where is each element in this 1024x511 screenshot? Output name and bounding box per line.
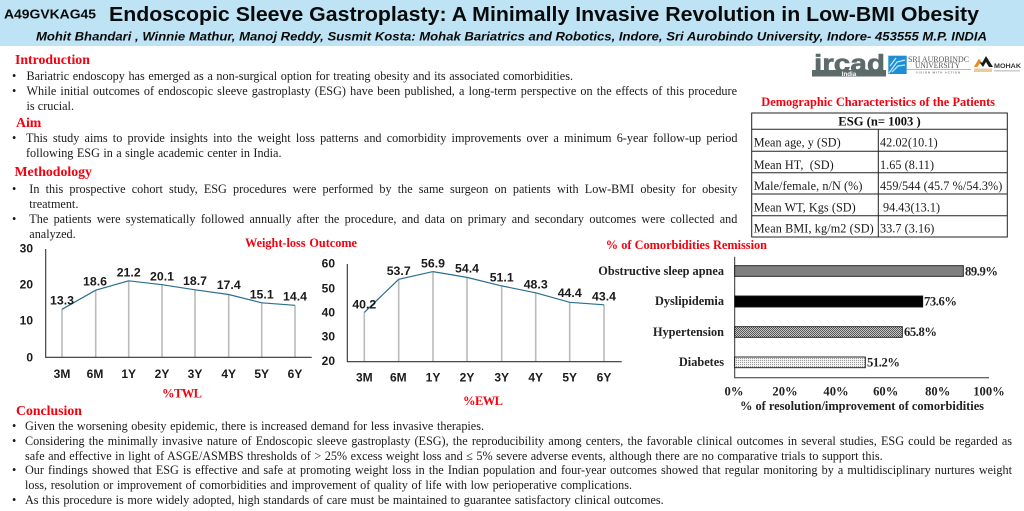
line chart: %TWL: 30: [20, 242, 33, 256]
bullet list: conclusion: safe and effective in light of ASGE/ASMBS thresholds of > 25% excess weight loss and ≤ 5% severe adverse events, although there are no comparative trials to support this.: [25, 449, 883, 463]
bar chart: comorbidity remission: Dyslipidemia: [655, 294, 724, 308]
line chart: %EWL: 6Y: [597, 371, 611, 385]
bullet list: conclusion: As this procedure is more widely adopted, high standards of care must be maintained to guarantee satisfactory clinical outcomes.: [25, 493, 664, 507]
table heading: demographic characteristics: Demographic Characteristics of the Patients: [761, 95, 995, 109]
line chart: %TWL: 5Y: [254, 367, 269, 381]
bullet list: methodology: treatment.: [29, 197, 78, 211]
table: demographic characteristics: Mean HT, (SD): [754, 158, 834, 172]
line chart: %EWL: 1Y: [426, 371, 440, 385]
line chart: %TWL: 10: [20, 314, 33, 328]
bullet list: introduction: is crucial.: [26, 99, 74, 113]
line chart: %EWL: 4Y: [528, 371, 543, 385]
logo: ircad india: ircad: [814, 50, 885, 78]
bullet list: methodology: In this prospective cohort study, ESG procedures were performed by the same surgeon on patients with Low-BMI obesity for obesity: [29, 182, 737, 196]
line chart: %TWL: 18.6: [83, 274, 107, 288]
line chart: %EWL: 3Y: [494, 371, 509, 385]
bullet list: methodology: •: [12, 182, 16, 196]
line chart: %EWL: 60: [322, 257, 335, 271]
line chart: %TWL: 20: [20, 278, 33, 292]
bullet list: introduction: [12, 69, 737, 113]
abstract id: A49GVKAG45: [4, 7, 96, 22]
line chart: %TWL: 21.2: [117, 265, 141, 279]
table: demographic characteristics: [751, 112, 1008, 238]
table: demographic characteristics: 459/544 (45.7 %/54.3%): [880, 179, 1002, 193]
line chart: %EWL: 43.4: [592, 289, 616, 303]
bullet list: conclusion: •: [12, 493, 16, 507]
line chart: %EWL: 56.9: [421, 257, 445, 271]
bar chart: comorbidity remission: 65.8%: [904, 325, 937, 339]
line chart: %TWL: %TWL: [162, 386, 202, 400]
bullet list: conclusion: •: [12, 434, 16, 448]
bullet list: introduction: While initial outcomes of endoscopic sleeve gastroplasty (ESG) have been published, a long-term perspective on the effects of this procedure: [26, 84, 737, 98]
table: demographic characteristics: Mean WT, Kgs (SD): [754, 201, 856, 215]
line chart: %EWL: 40: [322, 306, 335, 320]
line chart: %TWL: 17.4: [217, 278, 241, 292]
line chart: %TWL: 2Y: [155, 367, 169, 381]
heading: aim: Aim: [16, 114, 41, 130]
heading: methodology: Methodology: [14, 164, 92, 178]
heading: conclusion: Conclusion: [16, 402, 82, 418]
title: Endoscopic Sleeve Gastroplasty: A Minimally Invasive Revolution in Low-BMI Obesity: [109, 3, 980, 26]
bullet list: introduction: •: [12, 84, 16, 98]
line chart: %EWL: 20: [322, 354, 335, 368]
bullet list: conclusion: Our findings showed that ESG is effective and safe at promoting weight loss in the Indian population and four-year outcomes showed that regular monitoring by a multidisciplinary nurtures weight: [25, 463, 1012, 477]
line chart: %EWL: 51.1: [490, 271, 514, 285]
logo: sri aurobindo university: [888, 55, 971, 74]
section: aim: [12, 114, 738, 160]
heading: introduction: Introduction: [15, 52, 90, 67]
bullet list: conclusion: [12, 419, 1012, 507]
bullet list: conclusion: Considering the minimally invasive nature of Endoscopic sleeve gastroplasty (ESG), the reproducibility among centers, the favorable clinical outcomes in several studies, ESG could be regarded as: [25, 434, 1012, 448]
logo: sri aurobindo university: VISION WITH ACTION: [916, 70, 960, 74]
line chart: %TWL: 13.3: [50, 293, 74, 307]
table: demographic characteristics: Male/female, n/N (%): [754, 179, 862, 193]
chart heading: comorbidities remission: % of Comorbidities Remission: [606, 238, 767, 252]
bar chart: comorbidity remission: 60%: [873, 385, 898, 399]
line chart: %EWL: 53.7: [387, 264, 411, 278]
bar chart: comorbidity remission: 80%: [925, 385, 950, 399]
line chart: %EWL: 5Y: [562, 371, 577, 385]
line chart: %TWL: 4Y: [221, 367, 236, 381]
section: methodology: [12, 164, 738, 241]
line chart: %EWL: 30: [322, 330, 335, 344]
text: aim: This study aims to provide insights into the weight loss patterns and comorbidity improvements over a minimum 6-year follow-up period: [26, 131, 738, 145]
bar chart: comorbidity remission: 20%: [772, 385, 798, 399]
line chart: %EWL: 50: [322, 281, 335, 295]
bullet list: introduction: Bariatric endoscopy has emerged as a non-surgical option for treating obesity and its associated comorbidities.: [26, 69, 573, 83]
authors and affiliations: Mohit Bhandari , Winnie Mathur, Manoj Reddy, Susmit Kosta: Mohak Bariatrics and Robotics, Indore, Sri Aurobindo University, Indore- 453555 M.P. INDIA: [36, 30, 987, 44]
bar chart: comorbidity remission: Diabetes: [679, 355, 724, 369]
bullet list: methodology: The patients were systematically followed annually after the procedure, and data on primary and secondary outcomes were collected and: [29, 212, 737, 226]
logo: mohak: [974, 56, 1021, 72]
bar chart: comorbidity remission: 73.6%: [924, 295, 957, 309]
line chart: %EWL: %EWL: [463, 394, 503, 408]
line chart: %TWL: 6M: [87, 367, 103, 381]
line chart: %TWL: 3Y: [188, 367, 202, 381]
bullet list: conclusion: Given the worsening obesity epidemic, there is increased demand for less invasive therapies.: [25, 419, 484, 433]
table: demographic characteristics: 1.65 (8.11): [880, 158, 934, 172]
bar chart: comorbidity remission: 40%: [823, 385, 849, 399]
bullet list: methodology: analyzed.: [29, 227, 76, 241]
chart heading: weight-loss outcome: Weight-loss Outcome: [245, 236, 357, 250]
bullet list: conclusion: loss, resolution or improvement of comorbidities and improvement of quality of life with low perioperative complications.: [25, 478, 632, 492]
line chart: %EWL: 44.4: [558, 286, 582, 300]
line chart: %EWL: [322, 257, 622, 408]
line chart: %EWL: 6M: [390, 371, 407, 385]
line chart: %TWL: 3M: [54, 367, 70, 381]
line chart: %TWL: 20.1: [150, 269, 174, 283]
bullet list: introduction: •: [12, 69, 16, 83]
line chart: %EWL: 54.4: [455, 262, 479, 276]
line chart: %TWL: 6Y: [288, 367, 302, 381]
bar chart: comorbidity remission: [598, 256, 1005, 413]
bar chart: comorbidity remission: 100%: [973, 385, 1005, 399]
line chart: %EWL: 3M: [356, 371, 373, 385]
logos: [812, 50, 1021, 78]
line chart: %EWL: 40.2: [352, 297, 376, 311]
section: introduction: [12, 52, 737, 113]
text: aim: •: [12, 131, 16, 145]
line chart: %TWL: 1Y: [121, 367, 136, 381]
logo: sri aurobindo university: UNIVERSITY: [915, 61, 960, 70]
bar chart: comorbidity remission: 0%: [725, 385, 743, 399]
bullet list: methodology: [12, 182, 738, 241]
bar chart: comorbidity remission: 89.9%: [965, 265, 998, 279]
bullet list: methodology: •: [12, 212, 16, 226]
line chart: %TWL: 15.1: [250, 287, 274, 301]
line chart: %TWL: [20, 242, 312, 400]
line chart: %EWL: 48.3: [524, 277, 548, 291]
text: aim: [12, 131, 738, 160]
bar chart: comorbidity remission: % of resolution/improvement of comorbidities: [740, 399, 984, 413]
table: demographic characteristics: ESG (n= 1003 ): [838, 115, 921, 129]
logo: ircad india: India: [842, 71, 857, 78]
bullet list: conclusion: •: [12, 463, 16, 477]
line chart: %EWL: 2Y: [460, 371, 474, 385]
table: demographic characteristics: 94.43(13.1): [883, 201, 940, 215]
section: conclusion: [12, 402, 1012, 507]
logo: mohak: MOHAK: [994, 63, 1021, 70]
bar chart: comorbidity remission: 51.2%: [867, 356, 900, 370]
line chart: %TWL: 14.4: [283, 289, 307, 303]
bar chart: comorbidity remission: Hypertension: [653, 325, 724, 339]
line chart: %TWL: 18.7: [183, 274, 207, 288]
table: demographic characteristics: 42.02(10.1): [880, 136, 938, 150]
header banner: [0, 0, 1024, 46]
text: aim: following ESG in a single academic center in India.: [26, 146, 282, 160]
line chart: %TWL: 0: [26, 350, 33, 364]
bar chart: comorbidity remission: Obstructive sleep apnea: [598, 264, 724, 278]
logo: sri aurobindo university: SRI AUROBINDC: [908, 55, 969, 64]
bullet list: conclusion: •: [12, 419, 16, 433]
table: demographic characteristics: Mean BMI, kg/m2 (SD): [754, 222, 874, 236]
table: demographic characteristics: 33.7 (3.16): [880, 222, 934, 236]
table: demographic characteristics: Mean age, y (SD): [754, 136, 841, 150]
